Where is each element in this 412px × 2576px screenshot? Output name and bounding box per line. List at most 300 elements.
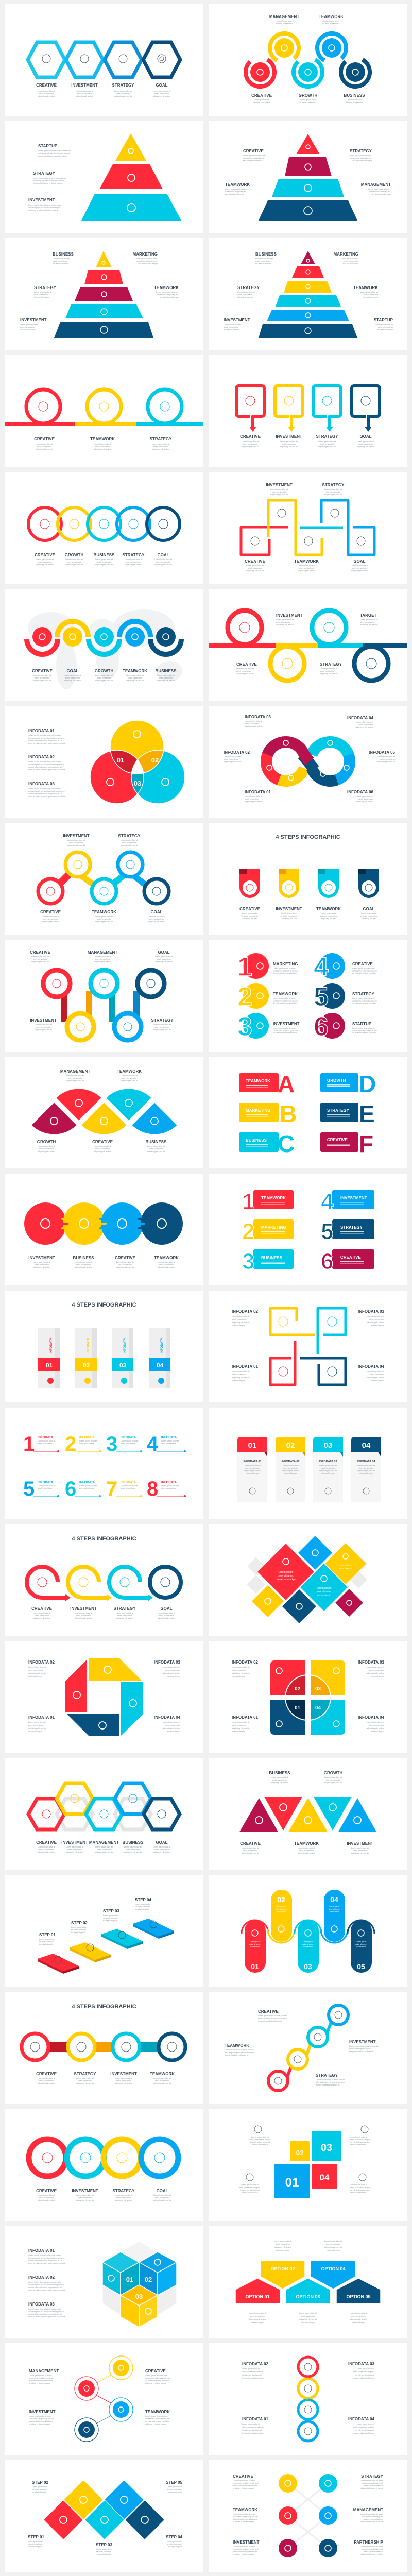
labels: Lorem ipsum dolor sit [153,2194,171,2196]
text blocks: adipiscing elit, sed do eiusmod tempor incidi- [28,764,65,766]
labels: Lorem ipsum dolor [167,2540,183,2543]
labels [28,1660,181,1733]
labels: STEP 02 [71,1921,88,1925]
labels: incididunt ut labore et dolore [360,2487,383,2489]
bars: 2 [242,1219,254,1244]
panel: numbers 1-8: amet, consectetur [79,1443,94,1445]
labels: sit amet, consectetur [280,915,298,917]
labels: INFODATA 03 [245,715,271,719]
labels: adipiscing elit, sed do [232,1672,249,1674]
labels: consectetur adipiscing elit, sed [145,2377,170,2379]
rings [29,2139,178,2176]
labels: Lorem ipsum dolor sit [232,1370,249,1372]
labels: Lorem ipsum dolor sit [147,1145,165,1147]
labels: adipiscing elit, sed [281,918,297,920]
labels: Lorem ipsum dolor sit [114,90,132,92]
labels: STARTUP [38,144,58,148]
hexagons [28,42,180,77]
column panels: 04 [362,1441,371,1450]
panel: numbers 1-8: Lorem ipsum dolor sit [79,1440,97,1442]
letter boxes: F [359,1130,373,1157]
labels: adipiscing elit, sed do [114,95,132,97]
labels: TEAMWORK [154,1256,179,1260]
labels: adipiscing elit, sed do [115,2199,132,2201]
labels: adipiscing elit, sed do [357,446,374,448]
labels: elit, sed do eiusmo [343,263,358,265]
labels: consectetur adipiscing elit, [350,157,372,159]
labels: Lorem ipsum dolor sit amet, [145,2415,168,2417]
text blocks: adipiscing elit, sed do eiusmod tempor incidi- [28,2311,65,2313]
labels [233,2474,384,2555]
labels: ing elit, sed do eiusmod [242,2374,262,2376]
labels: consectetur adipiscing elit, sed [352,999,377,1002]
labels [36,2072,175,2084]
labels: Lorem ipsum dolor sit [224,756,241,758]
labels [240,1771,373,1854]
labels: Lorem ipsum dolor sit [152,443,169,445]
captions: Lorem ipsum dolor sit [324,2240,342,2242]
labels: adipiscing elit, sed do [318,446,336,448]
labels: BUSINESS [146,1140,167,1144]
panel: triangles row [209,1758,407,1870]
labels: amet, consectetur [76,1264,91,1266]
number items: 4 [314,952,329,982]
labels: Lorem ipsum dolor sit [237,291,255,293]
labels: consectetur adipiscing elit, [362,2548,383,2550]
labels: amet, consectetur [122,842,137,844]
diamonds: consectetur adipi- [276,1578,296,1581]
diamonds: dolor sit amet, [278,1574,294,1578]
labels: Lorem ipsum dolor sit [356,721,373,723]
labels: adipiscing elit, sed do [116,1617,133,1619]
info items: INFODATA [161,1436,177,1439]
labels: amet, consectetur [237,294,252,296]
labels: consectetur adipiscing elit, sed [273,999,298,1002]
labels: tetur adipiscing elit, sed do eiusmod [316,2081,345,2083]
labels: sed do eiusmod tempor [159,296,179,298]
diamonds [252,1536,366,1623]
panel: vertical S chain [209,2343,407,2455]
labels: do eiusmod tempor incididunt [273,972,297,974]
labels: amet, consectetur [126,1849,141,1851]
labels: adipiscing elit, sed do [95,564,113,566]
icons and texts: amet, consectetur adipisc- [239,2187,261,2189]
labels: CREATIVE [243,149,264,154]
labels: consectetur adipiscing elit, sed [352,970,377,972]
labels: Lorem ipsum dolor sit [236,668,254,670]
labels: GROWTH [65,553,83,557]
panel: option arrows: OPTION 02 [270,2266,295,2272]
text blocks: INFODATA 02 [28,755,55,759]
fans [31,1089,178,1134]
labels: Lorem ipsum dolor sit [66,1846,83,1848]
labels: adipiscing elit, sed do [356,801,373,803]
labels: CREATIVE [34,437,55,442]
labels: CREATIVE [236,662,258,667]
labels: sit amet, consecte- [103,1917,119,1919]
labels: Lorem ipsum dolor sit [245,795,262,798]
labels: Lorem ipsum dolor sit amet, [233,2513,255,2515]
number items: 3 [237,1012,252,1042]
labels: adipiscing elit, sed do [242,446,259,448]
labels: amet, consectetur [28,1669,43,1671]
labels: Lorem ipsum dolor sit [66,1075,84,1077]
labels: Lorem ipsum dolor sit [115,2194,132,2196]
captions: eiusmod tempor [276,2249,290,2251]
labels: TEAMWORK [273,992,298,996]
labels: amet, consectetur adipisc- [353,2371,375,2373]
labels: Lorem ipsum dolor sit amet, [145,2375,168,2377]
labels: MANAGEMENT [353,2507,383,2512]
labels: INVESTMENT [71,83,98,88]
panel: pyramid 5 levels [5,238,203,350]
labels: amet, consectetur [53,260,67,262]
panel: option arrows [209,2226,407,2338]
labels: adipiscing elit, sed do [33,1617,50,1619]
letter boxes: E [359,1100,375,1127]
labels: amet, consectetur [299,1850,314,1852]
labels: amet, consectetur [35,1264,49,1266]
labels [30,950,174,1031]
panel: zigzag drop rings [5,823,203,935]
column panels: INFODATA 02 [281,1460,300,1463]
labels: Lorem ipsum dolor sit [245,720,262,722]
captions: adipiscing elit, sed do [274,2246,291,2248]
panel: option arrows: OPTION 01 [245,2294,270,2299]
labels: do eiusmod tempor incididunt [233,2485,257,2487]
labels: adipiscing elit, sed do [31,961,49,963]
labels: amet, consectetur [363,294,379,296]
labels: CREATIVE [30,950,51,955]
labels: tetur adipiscing elit, sed do [349,2048,371,2050]
labels: sit amet, consecte- [167,2543,183,2545]
labels: Lorem ipsum dolor sit [42,916,59,918]
labels [28,2480,183,2555]
panel: linked rings 5 [5,472,203,584]
panel: pyramid 3 levels [5,121,203,233]
labels: adipiscing elit, sed do [242,1852,259,1854]
labels: amet, consectetur [155,2080,170,2082]
panel: hanging rings [5,940,203,1052]
labels: adipiscing elit, sed do [155,961,173,963]
labels: amet, consectetur [155,1026,170,1028]
labels: amet, consectetur [33,958,48,960]
labels: amet, consectetur [360,621,375,623]
column panels: Lorem ipsum dolor sit [319,1465,337,1467]
labels: Lorem ipsum dolor sit [318,440,336,443]
labels: TEAMWORK [150,2072,175,2076]
pills: consectetur [250,1946,260,1948]
labels [224,715,396,803]
captions: adipiscing elit, sed do [350,2318,367,2320]
labels: sed do eiusmod tempor [371,193,391,195]
labels: amet, consectetur [149,1148,164,1150]
labels: MANAGEMENT [361,182,391,187]
labels: amet, consectetur [39,1849,54,1851]
captions [249,2240,367,2324]
labels: Lorem ipsum dolor sit [356,795,373,798]
panel: pin squares [209,355,407,467]
labels: amet, consectetur [35,1615,49,1617]
column panels: eiusmod tempor [359,1472,373,1475]
labels: Lorem ipsum dolor sit [65,558,83,561]
labels: adipiscing elit, sed do [280,446,298,448]
labels: PARTNERSHIP [354,2540,384,2545]
labels: CREATIVE [92,1140,113,1144]
wave arcs [27,621,181,654]
circuit squares [270,1308,346,1385]
labels: tur adipiscing elit. [71,1931,85,1934]
ribbons [239,869,379,898]
columns: INFODATA [161,1337,164,1353]
labels: ut labore et dolore magna [233,2521,254,2523]
labels: sit amet, consectetur [299,101,317,104]
labels: INVESTMENT [224,318,250,323]
numbers: 3 [106,1433,117,1455]
labels: tempor incididunt ut labore [353,2377,374,2379]
venn circles: 02 [151,756,159,764]
letter boxes: D [359,1071,376,1097]
bars: 5 [321,1219,333,1244]
labels: amet, consectetur [153,446,168,448]
text blocks: Lorem ipsum dolor sit amet, consectetur [28,788,62,790]
labels: Lorem ipsum dolor sit [76,2194,94,2196]
labels: BUSINESS [344,93,365,98]
labels: tur adipiscing elit. [103,1920,117,1922]
labels: Lorem ipsum dolor [28,2540,44,2543]
labels: amet, consectetur [97,918,112,920]
panel: quadrant squares with circle [209,1641,407,1753]
labels: ut labore et dolore magna [233,2487,254,2489]
letter boxes: MARKETING [246,1108,270,1113]
labels: Lorem ipsum dolor sit [124,1846,142,1848]
pinwheel pieces [65,1658,143,1736]
diamonds [45,2482,163,2538]
labels: Lorem ipsum dolor sit [280,440,298,443]
column panels: amet, consectetur [321,1467,336,1469]
labels: Lorem ipsum dolor sit [64,674,81,676]
labels: STRATEGY [316,2073,338,2078]
labels: adipiscing elit, sed do [271,1782,288,1784]
info items: INFODATA [121,1481,136,1484]
labels: do eiusmod tempor incididunt [233,2518,257,2520]
info items: INFODATA [79,1481,95,1484]
labels: Lorem ipsum dolor sit [76,90,93,92]
labels: sed do eiusmod tempor [352,160,372,162]
labels: tetur adipiscing elit, sed do eiusmod [225,2052,254,2054]
letter boxes: A [278,1071,295,1097]
labels: GOAL [157,553,169,557]
labels: Lorem ipsum dolor [32,2486,48,2488]
bars: TEAMWORK [261,1196,286,1200]
text blocks: INFODATA 03 [28,2302,55,2307]
labels: INFODATA 01 [232,1715,259,1720]
labels: INVESTMENT [233,2540,260,2545]
labels: Lorem ipsum dolor sit [153,90,170,92]
labels: adipiscing elit, sed do [38,2199,55,2201]
labels: amet, consectetur [116,2080,131,2082]
labels: MANAGEMENT [89,1840,119,1845]
labels: Lorem ipsum dolor sit [298,565,315,567]
labels [236,613,377,675]
labels: amet, consectetur [369,1724,385,1726]
labels: amet, consectetur [39,1148,54,1150]
labels: Lorem ipsum dolor sit [242,2368,260,2370]
bars: MARKETING [261,1225,286,1230]
numbers: 5 [23,1478,35,1500]
letter boxes: BUSINESS [246,1138,267,1143]
labels: adipiscing elit, sed do [245,725,262,727]
labels: sit amet, consecte- [39,1941,55,1943]
labels [232,1660,385,1733]
labels: amet, consectetur [68,1077,83,1079]
labels: amet, consectetur [78,2080,93,2082]
labels: INFODATA 04 [358,1715,385,1720]
labels: amet, consectetur [77,93,92,95]
labels: adipiscing elit, sed do [232,1727,249,1730]
pills: consectetur [303,1946,313,1948]
labels: amet, consectetur [320,443,335,445]
labels: amet, consectetur [34,294,49,296]
labels: amet, consectetur [117,1615,132,1617]
labels: amet, consectetur [38,561,53,563]
labels: amet, consectetur [243,1850,258,1852]
labels: amet, consectetur [28,1724,43,1726]
circles [24,1202,183,1245]
labels: Lorem ipsum dolor sit [95,558,113,561]
panel: option arrows: OPTION 04 [321,2266,346,2272]
captions: adipiscing elit, sed do [249,2318,266,2320]
labels: amet, consectetur [39,93,54,95]
pills: Lorem ipsum [356,1941,366,1943]
text blocks: INFODATA 03 [28,782,55,786]
labels: adipiscing elit, sed do [356,726,373,728]
labels: adipiscing elit, sed do [153,1851,170,1853]
labels: CREATIVE [240,434,261,439]
labels: tur adipiscing elit, [97,2553,111,2555]
captions: Lorem ipsum dolor sit [350,2312,367,2314]
labels: Lorem ipsum dolor [321,912,337,914]
panel: 4 steps chain rings [5,1992,203,2104]
venn circles: 03 [134,779,141,787]
captions: adipiscing elit, sed do [299,2318,317,2320]
labels: INVESTMENT [110,2072,137,2076]
labels: amet, consectetur [299,567,314,569]
circles [75,2356,133,2442]
labels: tur adipiscing elit, [168,2491,182,2493]
squares [274,2131,341,2198]
labels: Lorem ipsum dolor sit [357,440,374,443]
infinity [266,740,350,781]
labels: amet, consectetur [155,2197,170,2199]
labels: adipiscing elit, sed [321,918,336,920]
labels: INFODATA 04 [154,1715,181,1720]
column panels: 01 [248,1441,256,1450]
title: 4 STEPS INFOGRAPHIC [72,2004,136,2010]
labels: consectetur adipiscing elit, [369,191,391,193]
text blocks: Lorem ipsum dolor sit amet, consectetur [28,761,62,763]
letter boxes: CREATIVE [327,1138,348,1142]
title: 4 STEPS INFOGRAPHIC [276,834,340,840]
labels [225,149,391,195]
labels: Lorem ipsum dolor sit amet, [243,155,266,157]
quadrants: 04 [315,1705,321,1711]
labels [239,907,377,920]
arcs [242,1920,374,1943]
labels: consectetur adipiscing elit, sed [29,2377,54,2379]
labels: sed do eiusmod tempor [225,193,245,195]
labels: amet, consectetur [36,1026,51,1028]
labels: amet, consectetur [358,798,374,800]
quadrants: 02 [295,1686,301,1692]
labels: adipiscing elit, sed do [298,570,315,572]
labels: GOAL [359,434,372,439]
pills: 02 [277,1895,285,1904]
labels: adipiscing elit, sed do [94,961,111,963]
labels: tempor incididunt ut labore et [316,2084,339,2086]
numbers: 8 [147,1478,158,1500]
labels: amet, consectetur [97,1849,112,1851]
labels: TEAMWORK [154,285,179,290]
labels: amet, consectetur [67,1849,82,1851]
pills: consectetur [356,1946,366,1948]
labels: Lorem ipsum dolor sit [375,324,393,326]
numbers: 7 [106,1478,117,1500]
columns: 02 [83,1362,90,1369]
labels [28,1256,179,1268]
options [235,2261,381,2303]
labels: adipiscing elit, sed do [66,1080,84,1082]
labels [232,1309,385,1382]
labels: Lorem ipsum dolor [254,99,270,101]
labels: adipiscing elit, sed do [276,624,294,626]
labels: amet, consectetur [35,677,50,679]
labels: STRATEGY [316,434,338,439]
text blocks: enim ad minim veniam, quis nostrud exercita- [28,2289,66,2291]
labels: INVESTMENT [20,318,47,323]
labels: GROWTH [324,1771,342,1775]
labels: STEP 03 [103,1909,119,1913]
labels: eiusmod tempor [232,1380,246,1382]
labels: amet, consectetur [39,2080,54,2082]
labels: elit, sed do eiusmo [363,296,378,298]
labels: Lorem ipsum dolor sit amet, consectetur [33,177,66,179]
connectors [41,2040,166,2054]
panel: circle tree [5,2343,203,2455]
text blocks: dunt ut labore et dolore magna aliqua. Ut [28,766,62,768]
labels: amet, consectetur [232,1374,247,1376]
labels: TARGET [360,613,376,618]
labels: CREATIVE [36,1840,57,1845]
pyramid [81,133,181,221]
panel: isometric cube: 03 [135,2293,143,2300]
labels: INVESTMENT [28,1256,55,1260]
labels: adipiscing elit, sed do [28,1672,46,1674]
panel: isometric steps [5,1875,203,1987]
captions: Lorem ipsum dolor sit [274,2240,291,2242]
captions: Lorem ipsum dolor sit [249,2312,266,2314]
labels: STRATEGY [237,285,260,290]
labels: Lorem ipsum dolor [242,912,258,914]
labels: Lorem ipsum dolor sit [163,1666,180,1668]
labels: MARKETING [273,962,298,967]
labels: adipiscing elit, sed do [65,564,83,566]
panel: circle arrows [209,4,407,116]
loop line [5,389,203,424]
icons and texts [239,2126,372,2194]
labels: GOAL [156,2189,168,2193]
labels: STRATEGY [320,662,342,667]
